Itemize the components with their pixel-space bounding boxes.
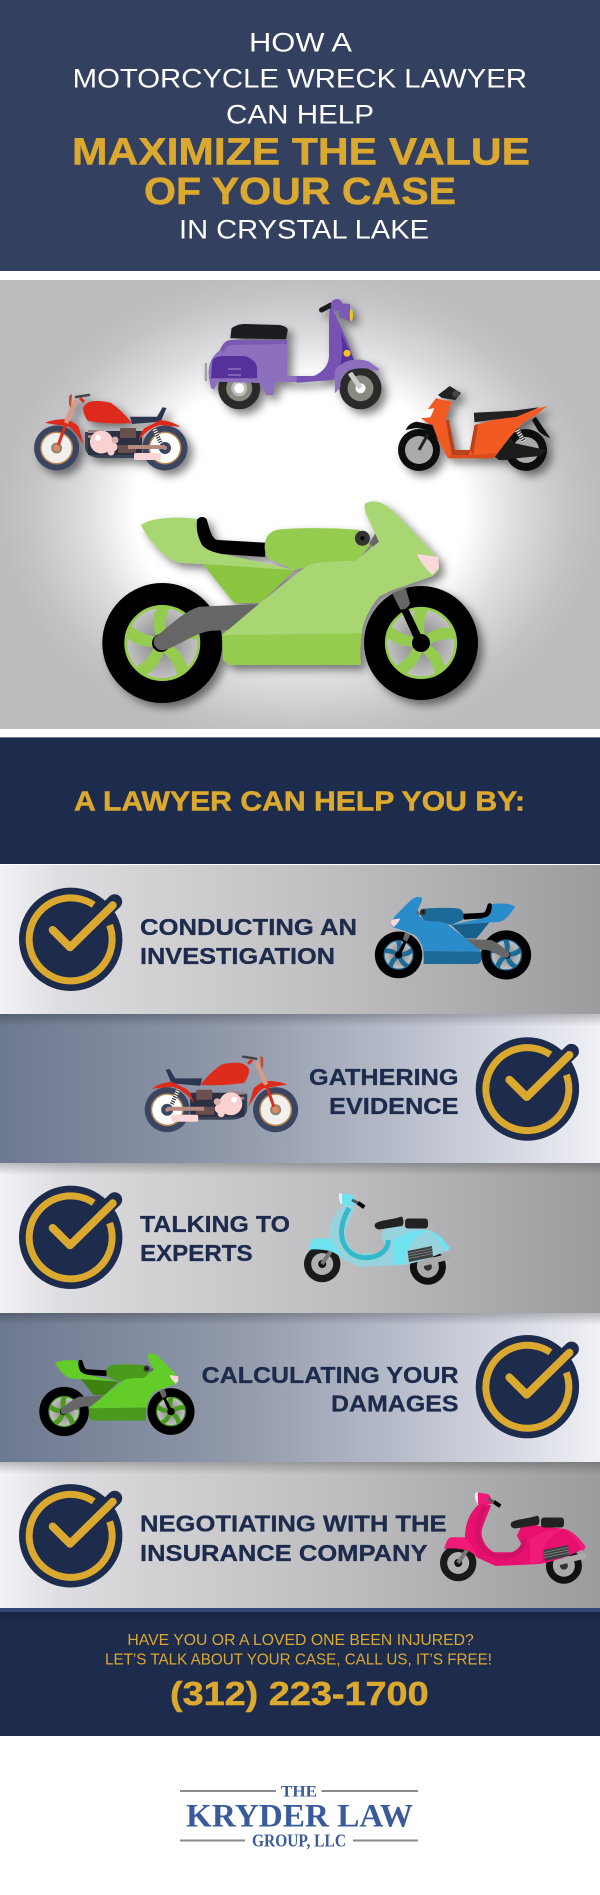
large green sport motorcycle <box>102 501 478 703</box>
row 4 text <box>202 1362 459 1417</box>
row 4 text: CALCULATING YOUR <box>202 1362 459 1388</box>
icon: check badge <box>476 1335 579 1438</box>
title: IN CRYSTAL LAKE <box>179 214 429 244</box>
call to action text: HAVE YOU OR A LOVED ONE BEEN INJURED? <box>127 1632 474 1649</box>
logo: The Kryder Law Group <box>180 1784 418 1851</box>
row 3: talking to experts <box>0 1163 600 1313</box>
orange scooter <box>398 386 550 471</box>
pink scooter <box>440 1492 586 1584</box>
row 3 text <box>140 1211 290 1266</box>
row 5 text <box>140 1511 447 1566</box>
section heading: A LAWYER CAN HELP YOU BY: <box>74 786 525 817</box>
title: MAXIMIZE THE VALUE <box>72 131 530 173</box>
row 1 text: CONDUCTING AN <box>140 914 357 940</box>
title: HOW A <box>249 28 352 58</box>
logo: The Kryder Law Group: KRYDER LAW <box>186 1799 413 1835</box>
row 3 text: TALKING TO <box>140 1211 290 1237</box>
blue sport motorcycle <box>375 897 531 980</box>
title: CAN HELP <box>226 100 374 130</box>
icon: check badge <box>19 1484 122 1588</box>
footer call to action <box>0 1608 600 1736</box>
logo: The Kryder Law Group: THE <box>281 1784 317 1801</box>
title <box>72 28 530 244</box>
green sport motorcycle <box>39 1353 195 1436</box>
cyan scooter <box>304 1193 450 1285</box>
row 4 text: DAMAGES <box>331 1391 458 1417</box>
row 2 text: GATHERING <box>309 1064 458 1090</box>
purple scooter <box>205 299 382 409</box>
row 5 text: NEGOTIATING WITH THE <box>140 1511 447 1537</box>
row 2 text <box>309 1064 458 1119</box>
row 5 text: INSURANCE COMPANY <box>140 1540 428 1566</box>
row 3 text: EXPERTS <box>140 1240 253 1266</box>
row 1 text: INVESTIGATION <box>140 943 335 969</box>
row 1: conducting an investigation <box>0 865 600 1014</box>
red cruiser motorcycle <box>34 394 187 470</box>
icon: check badge <box>19 888 122 991</box>
call to action text: LET’S TALK ABOUT YOUR CASE, CALL US, IT’S FREE! <box>105 1651 492 1668</box>
section heading band <box>0 737 600 864</box>
header panel <box>0 0 600 271</box>
title: OF YOUR CASE <box>144 171 456 213</box>
icon: check badge <box>19 1186 122 1289</box>
row 1 text <box>140 914 357 969</box>
row 2 text: EVIDENCE <box>329 1093 458 1119</box>
icon: check badge <box>476 1037 579 1141</box>
phone number: (312) 223-1700 <box>170 1675 429 1712</box>
row 5: negotiating with the insurance company <box>0 1462 600 1608</box>
hero panel: motorcycles <box>0 280 600 729</box>
row 4: calculating your damages <box>0 1313 600 1462</box>
red cruiser motorcycle <box>145 1056 298 1132</box>
call to action text <box>105 1632 492 1668</box>
row 2: gathering evidence <box>0 1014 600 1163</box>
logo: The Kryder Law Group: GROUP, LLC <box>252 1831 346 1851</box>
title: MOTORCYCLE WRECK LAWYER <box>73 64 527 94</box>
